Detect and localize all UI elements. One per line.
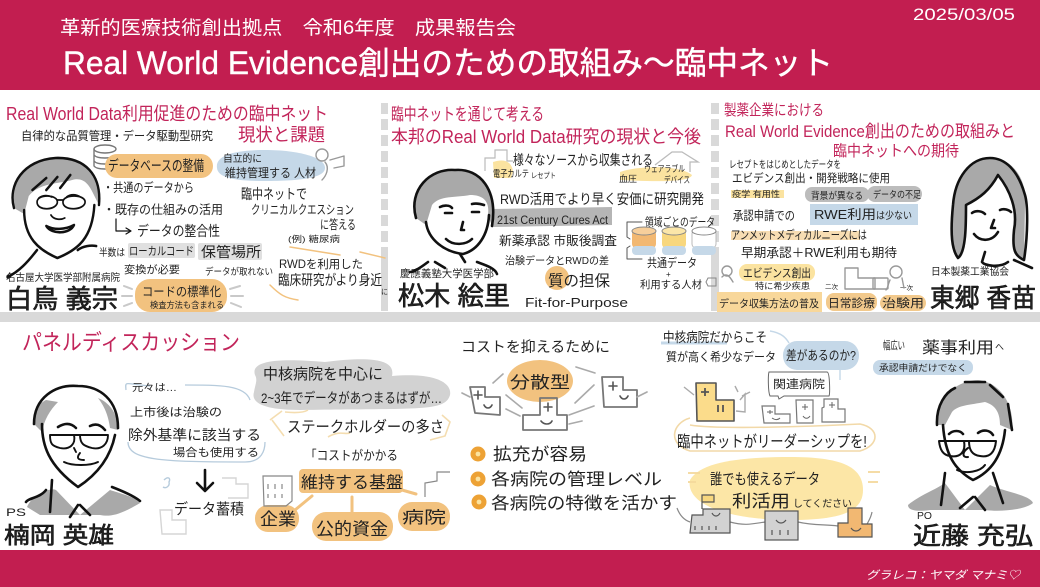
cost reduction heading: コストを抑えるために bbox=[461, 339, 610, 356]
moderator role: PS bbox=[6, 507, 26, 519]
data collection pill bbox=[717, 292, 822, 312]
panel: Shirotori talk bbox=[6, 104, 388, 314]
speaker name: 白鳥 義宗 bbox=[6, 284, 118, 314]
unmet needs note: アンメットメディカルニーズには bbox=[731, 227, 867, 242]
RWD clinical research note: 臨床研究がより身近 bbox=[278, 272, 382, 288]
core hospital note bbox=[661, 330, 776, 364]
question bubble bbox=[770, 331, 859, 380]
routine care and trial use: 一次 bbox=[900, 283, 914, 292]
RWE usage low: は少ない bbox=[876, 209, 912, 222]
staff pill: 自立的に bbox=[223, 152, 262, 165]
icons: company and hospital bbox=[263, 472, 450, 506]
epidemiology tags: 疫学 有用性 bbox=[732, 189, 781, 199]
gray bubble bbox=[253, 359, 450, 410]
routine care and trial use: 二次 bbox=[825, 282, 838, 291]
distributed pill: 分散型 bbox=[510, 373, 570, 392]
routine care and trial use: 治験用 bbox=[882, 296, 924, 310]
panel heading line 1: 製薬企業における bbox=[724, 102, 824, 119]
local code note: 保管場所 bbox=[201, 244, 261, 260]
speaker affiliation: 日本製薬工業協会 bbox=[931, 265, 1009, 278]
core hospital note: 質が高く希少なデータ bbox=[666, 349, 776, 364]
staff pill bbox=[217, 150, 325, 181]
clinical question note: クリニカルクエスション bbox=[251, 203, 354, 217]
RWD usage line: RWD活用でより早く安価に研究開発 bbox=[500, 191, 704, 207]
broad regulatory use note: 承認申請だけでなく bbox=[879, 362, 967, 373]
cost note: 「コストがかかる bbox=[305, 448, 398, 463]
evidence creation pill: 特に希少疾患 bbox=[755, 281, 811, 291]
portrait: Shirotori bbox=[7, 158, 99, 277]
benefit bullets: 各病院の管理レベル bbox=[491, 470, 662, 489]
stakeholders burst bbox=[270, 410, 450, 440]
speaker affiliation: 名古屋大学医学部附属病院 bbox=[6, 271, 120, 284]
funder pills and arrows: 企業 bbox=[260, 510, 296, 529]
panel heading line 3: 臨中ネットへの期待 bbox=[833, 142, 959, 160]
database pill: データベースの整備 bbox=[108, 157, 204, 175]
local code note bbox=[99, 243, 273, 278]
evidence creation pill: エビデンス創出 bbox=[743, 266, 811, 280]
moderator note box: 場合も使用する bbox=[173, 446, 259, 459]
call to action cloud: 誰でも使えるデータ bbox=[710, 470, 820, 488]
21st Century Cures Act: 21st Century Cures Act bbox=[497, 215, 609, 227]
infrastructure box: 維持する基盤 bbox=[301, 473, 403, 492]
bullet list: ・既存の仕組みの活用 bbox=[103, 203, 223, 217]
benefit bullets bbox=[470, 445, 677, 513]
sources line: 様々なソースから収集される bbox=[513, 152, 653, 168]
date: 2025/03/05 bbox=[913, 6, 1015, 24]
bullet list: データの整合性 bbox=[137, 223, 220, 239]
icons: hospital and person bbox=[722, 266, 904, 290]
RWE usage low: RWE利用 bbox=[814, 207, 876, 222]
icons: three hospitals bbox=[462, 367, 647, 430]
sketch document icons bbox=[160, 478, 248, 534]
broad regulatory use note: 幅広い bbox=[883, 339, 905, 352]
down arrow bbox=[197, 470, 213, 491]
clinical question note: (例) 糖尿病 bbox=[288, 234, 341, 244]
code standardisation pill bbox=[122, 279, 243, 312]
RWE usage low: 承認申請での bbox=[733, 209, 795, 223]
PO role: PO bbox=[917, 511, 932, 522]
intro line: 自律的な品質管理・データ駆動型研究 bbox=[21, 128, 213, 143]
moderator note box: 元々は… bbox=[132, 382, 177, 394]
moderator name: 楠岡 英雄 bbox=[4, 522, 114, 548]
21st Century Cures Act bbox=[490, 207, 612, 227]
portrait: Kondo bbox=[908, 380, 1033, 511]
RWD clinical research note: に bbox=[381, 288, 388, 296]
call to action cloud: してください bbox=[793, 498, 852, 510]
regional data diagram: 利用する人材 bbox=[640, 278, 702, 291]
local code note: 半数は bbox=[99, 246, 125, 259]
related hospitals label: 関連病院 bbox=[773, 377, 826, 391]
evidence creation pill bbox=[739, 264, 815, 291]
funder pills and arrows bbox=[255, 490, 450, 541]
Fit-for-Purpose: Fit-for-Purpose bbox=[525, 295, 628, 310]
leadership bubble bbox=[675, 418, 875, 451]
routine care and trial use bbox=[825, 282, 926, 311]
regional data diagram: 領域ごとのデータ bbox=[645, 215, 715, 229]
bullet list bbox=[103, 180, 223, 239]
header band bbox=[0, 0, 1040, 90]
main title: Real World Evidence創出のための取組み～臨中ネット bbox=[63, 45, 833, 81]
portrait: Matsumoto bbox=[410, 170, 497, 274]
benefit bullets: 各病院の特徴を活かす bbox=[491, 494, 677, 513]
quality assurance: 質の担保 bbox=[548, 272, 610, 290]
footer band bbox=[0, 550, 1040, 587]
source labels bbox=[493, 163, 692, 185]
code standardisation pill: コードの標準化 bbox=[142, 284, 221, 299]
gray difficulty clouds: データの不足 bbox=[873, 189, 921, 201]
local code note: データが取れない bbox=[205, 266, 273, 278]
broad regulatory use note: 薬事利用 bbox=[922, 339, 994, 357]
section heading: パネルディスカッション bbox=[22, 330, 240, 355]
panel: Matsumoto talk bbox=[391, 105, 716, 311]
database pill bbox=[105, 154, 213, 178]
source labels: デバイス bbox=[664, 174, 690, 185]
broad regulatory use note bbox=[873, 339, 1004, 375]
unmet needs note bbox=[731, 227, 898, 260]
icons: hospitals bbox=[684, 383, 845, 423]
leadership bubble: 臨中ネットがリーダーシップを! bbox=[677, 433, 867, 451]
PO name: 近藤 充弘 bbox=[913, 523, 1033, 550]
call to action cloud bbox=[688, 457, 880, 520]
RWE usage low bbox=[733, 204, 918, 225]
gray difficulty clouds: 背景が異なる bbox=[811, 190, 863, 202]
icon: person with book bbox=[316, 149, 344, 180]
speaker affiliation: 慶應義塾大学医学部 bbox=[400, 267, 494, 280]
regional data diagram bbox=[627, 215, 716, 291]
benefit bullets: 拡充が容易 bbox=[493, 445, 587, 464]
moderator note box: 上市後は治験の bbox=[130, 405, 222, 419]
stakeholders burst: ステークホルダーの多さ bbox=[287, 418, 444, 436]
moderator note box: 除外基準に該当する bbox=[128, 427, 261, 443]
clinical question note: 臨中ネットで bbox=[241, 186, 307, 202]
panel: panel discussion bbox=[4, 330, 1033, 550]
local code note: ローカルコード bbox=[129, 245, 194, 258]
speaker name: 松木 絵里 bbox=[398, 281, 510, 311]
icons: stakeholders bbox=[677, 495, 872, 540]
clinical question note: に答える bbox=[320, 217, 356, 232]
icon: database bbox=[94, 145, 116, 169]
source labels: 電子カルテ bbox=[493, 169, 529, 180]
new drug approval: 新薬承認 市販後調査 bbox=[499, 234, 617, 248]
portrait: Kusuoka bbox=[26, 386, 140, 517]
data accumulation: データ蓄積 bbox=[174, 500, 244, 518]
code standardisation pill: 検査方法も含まれる bbox=[150, 300, 224, 310]
clinical question note bbox=[241, 186, 356, 244]
gray bubble: 2~3年でデータがあつまるはずが… bbox=[261, 390, 442, 406]
panel heading: Real World Data利用促進のための臨中ネット bbox=[6, 104, 328, 124]
header subtitle: 革新的医療技術創出拠点 令和6年度 成果報告会 bbox=[60, 17, 516, 39]
related hospitals label bbox=[768, 372, 830, 399]
panel subheading: 現状と課題 bbox=[238, 125, 325, 145]
data collection pill: データ収集方法の普及 bbox=[719, 297, 819, 310]
regional data diagram: 共通データ bbox=[647, 255, 697, 270]
routine care and trial use: 日常診療 bbox=[828, 296, 876, 310]
speaker name: 東郷 香苗 bbox=[930, 283, 1036, 313]
unmet needs note: 早期承認＋RWE利用も期待 bbox=[741, 246, 898, 260]
source labels: ウェアラブル bbox=[644, 163, 685, 174]
funder pills and arrows: 公的資金 bbox=[316, 519, 388, 539]
distributed pill bbox=[507, 360, 573, 402]
staff pill: 維持管理する 人材 bbox=[225, 165, 316, 180]
regional data diagram: + bbox=[666, 270, 671, 279]
gray difficulty clouds bbox=[805, 186, 922, 202]
question bubble: 差があるのか? bbox=[786, 348, 856, 363]
illustrator credit: グラレコ：ヤマダ マナミ♡ bbox=[866, 569, 1022, 582]
core hospital note: 中核病院だからこそ bbox=[663, 330, 767, 345]
source labels: レセプト bbox=[531, 171, 556, 180]
call to action cloud: 利活用 bbox=[732, 492, 790, 511]
icon: house outline bbox=[655, 152, 698, 172]
receipt data note bbox=[729, 158, 890, 185]
panel heading line 2: 本邦のReal World Data研究の現状と今後 bbox=[391, 127, 701, 147]
source labels: 血圧 bbox=[619, 173, 637, 184]
panel heading line 1: 臨中ネットを通じて考える bbox=[391, 105, 544, 124]
trial vs RWD difference: 治験データとRWDの差 bbox=[505, 254, 609, 267]
receipt data note: エビデンス創出・開発戦略に使用 bbox=[732, 171, 890, 185]
bullet list: ・共通のデータから bbox=[103, 180, 194, 195]
local code note: 変換が必要 bbox=[124, 263, 181, 276]
broad regulatory use note: へ bbox=[995, 342, 1004, 352]
RWD clinical research note: RWDを利用した bbox=[279, 258, 363, 271]
receipt data note: レセプトをはじめとしたデータを bbox=[729, 158, 841, 171]
RWD clinical research note bbox=[270, 247, 388, 300]
icon: hospital outline bbox=[485, 150, 513, 178]
panel: Togo talk bbox=[717, 102, 1036, 313]
portrait: Togo bbox=[952, 158, 1032, 268]
funder pills and arrows: 病院 bbox=[402, 508, 446, 527]
quality assurance bbox=[545, 266, 610, 290]
gray bubble: 中核病院を中心に bbox=[263, 366, 383, 383]
moderator note box bbox=[126, 382, 265, 462]
